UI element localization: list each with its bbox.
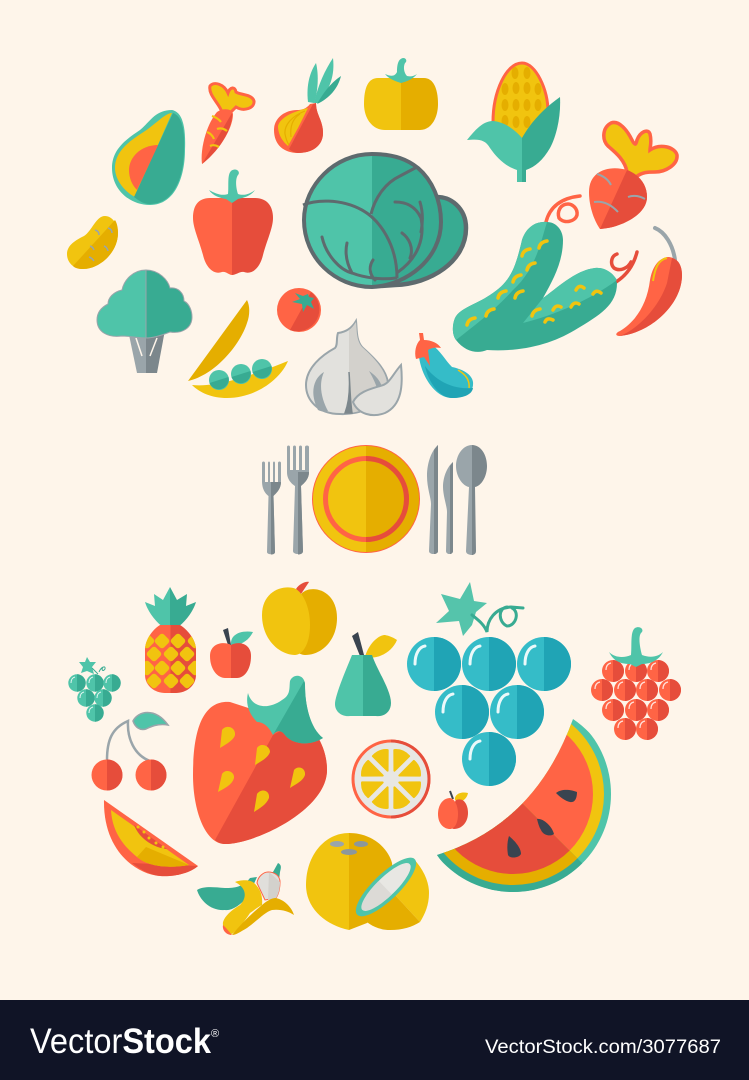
icon: potato xyxy=(67,216,118,269)
icon: spoon xyxy=(456,445,487,555)
icon: small apple xyxy=(210,628,253,678)
icon: banana xyxy=(197,863,294,935)
icon: avocado xyxy=(112,110,185,205)
vegetables group xyxy=(67,58,682,415)
icon: pineapple xyxy=(145,587,196,693)
icon: eggplant xyxy=(415,333,473,398)
icon: tomato xyxy=(277,288,321,332)
icon: small grapes xyxy=(68,657,121,722)
icon: pear xyxy=(335,632,397,716)
icon: coconut xyxy=(306,833,429,930)
icon: yellow plum xyxy=(262,582,337,655)
icon: yellow squash xyxy=(364,58,438,130)
icon: garlic xyxy=(306,321,402,415)
fruits group xyxy=(68,582,681,935)
icon: raspberry xyxy=(591,627,681,740)
icon: bell pepper xyxy=(193,170,273,275)
icon: small fork xyxy=(262,462,281,554)
icon: cabbage xyxy=(303,154,466,287)
icon: broccoli xyxy=(97,270,192,373)
icon: corn xyxy=(467,63,560,182)
icon: strawberry xyxy=(193,676,327,844)
icon: cherries xyxy=(92,712,168,790)
footer: image id: VectorStock.com/3077687 xyxy=(485,1037,721,1058)
icon: orange slice xyxy=(352,740,430,818)
footer bar xyxy=(0,1000,749,1080)
icon: melon slice xyxy=(104,800,198,876)
icon: carrot xyxy=(202,84,254,164)
icon: cucumbers xyxy=(453,196,637,352)
icon: large grapes xyxy=(407,582,571,786)
icon: plate xyxy=(312,445,420,553)
footer: registered mark: ® xyxy=(211,1028,219,1040)
icon: small knife xyxy=(443,462,453,554)
plate and cutlery group xyxy=(262,445,487,555)
icon: small red fruit xyxy=(438,791,468,829)
footer: VectorStock logo: VectorStock xyxy=(30,1022,211,1061)
icon: chili pepper xyxy=(616,228,682,336)
icon: onion xyxy=(274,58,341,153)
icon: watermelon xyxy=(437,719,611,892)
icon: large fork xyxy=(287,446,309,554)
icon: large knife xyxy=(427,445,438,554)
icon: pea pod xyxy=(188,300,288,398)
icon: beet xyxy=(589,122,677,229)
